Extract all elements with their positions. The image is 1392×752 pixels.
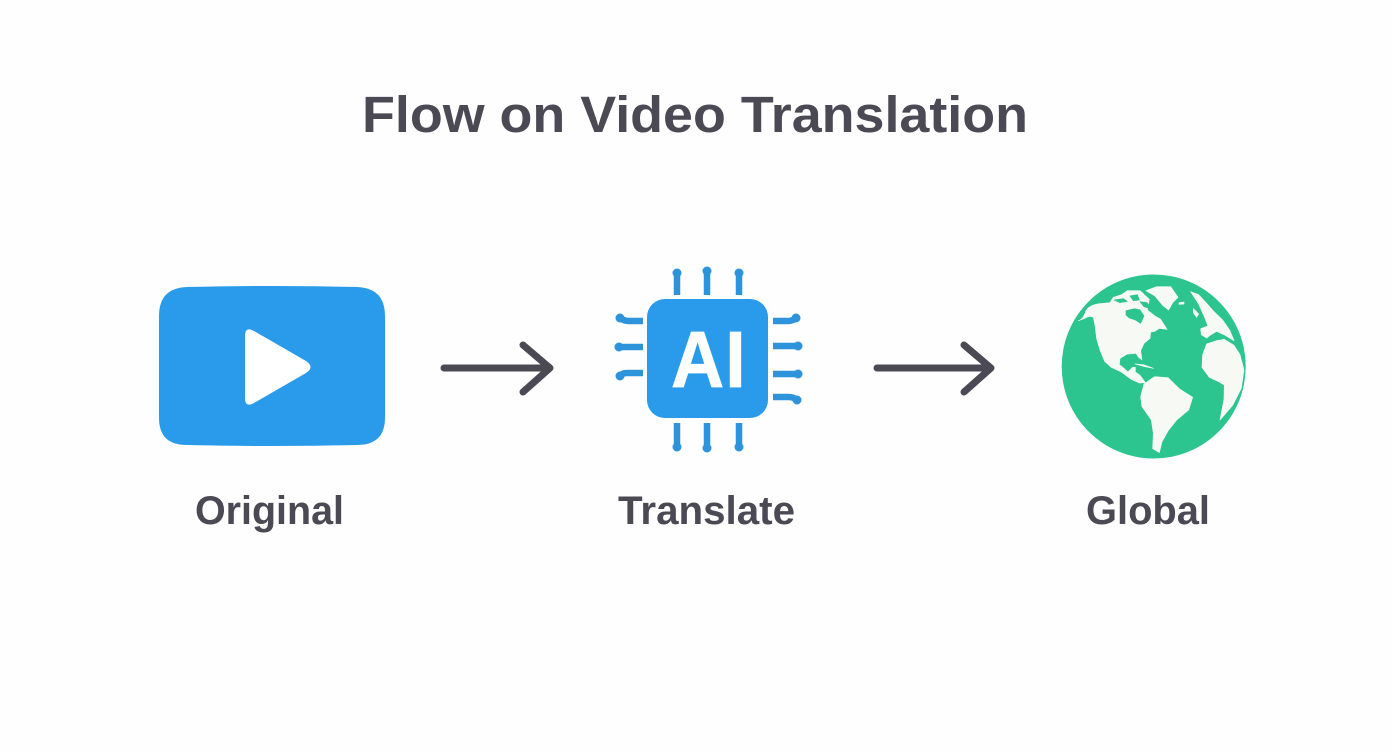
- South America: [1141, 377, 1193, 453]
- Europe: [1191, 292, 1234, 341]
- Caribbean islands: [1135, 364, 1153, 368]
- arrow: translate to global: [877, 345, 991, 392]
- title: Flow on Video Translation: [362, 86, 1028, 143]
- North and Central America: [1078, 291, 1167, 383]
- Iceland/British Isles: [1179, 302, 1199, 317]
- chip label: AI: [671, 315, 746, 405]
- Africa: [1202, 339, 1244, 420]
- globe continents: [1078, 287, 1244, 453]
- chip pin tips: [614, 266, 802, 452]
- icon: AI chip: [614, 266, 802, 452]
- Hudson Bay: [1126, 309, 1144, 323]
- icon: green globe: [1062, 274, 1246, 458]
- arrow: original to translate: [444, 345, 550, 392]
- chip body: [647, 299, 768, 418]
- label: Original: Original: [195, 489, 344, 533]
- Arctic channels: [1114, 295, 1150, 309]
- label: Global: Global: [1086, 489, 1210, 533]
- label: Translate: Translate: [618, 489, 795, 533]
- chip pins: [619, 271, 798, 448]
- Greenland: [1146, 287, 1178, 310]
- icon: video play button: [159, 286, 385, 446]
